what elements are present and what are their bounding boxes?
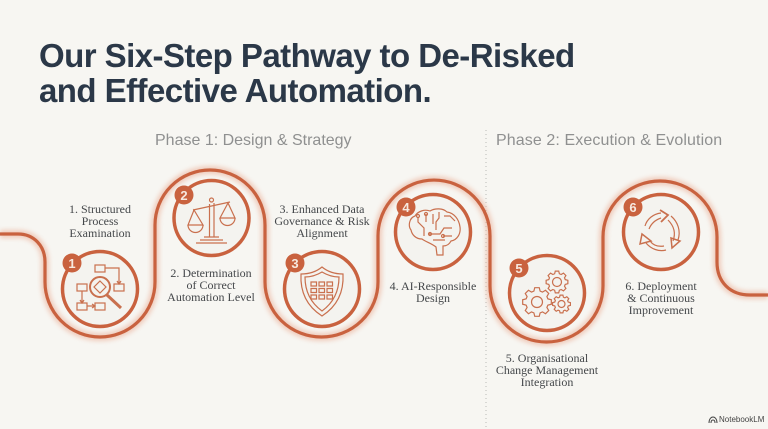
label: step 1: Examination	[69, 226, 131, 240]
label: step 3: 3. Enhanced Data	[280, 202, 364, 216]
step 1 node	[62, 252, 138, 326]
title: and Effective Automation.	[39, 72, 431, 109]
label: step 1	[69, 202, 131, 240]
label: step 3: Alignment	[296, 226, 348, 240]
step 3 node	[284, 252, 360, 326]
label: step 5: 5. Organisational	[506, 351, 588, 365]
label: step 1: Process	[82, 214, 118, 228]
label: step 6: & Continuous	[627, 291, 695, 305]
icon: gears	[523, 271, 570, 316]
icon: process flow and magnifier	[77, 265, 124, 310]
title: Our Six-Step Pathway to De-Risked	[39, 37, 575, 74]
label: step 4: Design	[416, 291, 450, 305]
label: step 2: of Correct	[186, 278, 235, 292]
label: step 2	[167, 266, 255, 304]
label: step 5	[496, 351, 598, 389]
step 4 node	[396, 194, 470, 270]
label: step 5: Integration	[521, 375, 573, 389]
icon: cycle arrows	[640, 210, 680, 251]
heading: phase 2: Phase 2: Execution & Evolution	[496, 132, 722, 149]
label: step 6	[625, 279, 697, 317]
icon: shield	[301, 267, 343, 316]
badge 1: 1	[68, 256, 76, 271]
label: step 4	[390, 279, 476, 305]
label: step 2: Automation Level	[167, 290, 255, 304]
step 2 node	[174, 180, 249, 256]
label: step 2: 2. Determination	[170, 266, 252, 280]
badge 2: 2	[180, 188, 188, 203]
label: step 6: Improvement	[629, 303, 693, 317]
step 6 node	[624, 194, 698, 270]
label: step 6: 6. Deployment	[625, 279, 697, 293]
icon: AI brain	[409, 209, 460, 255]
step 5 node	[510, 256, 584, 330]
badge 5: 5	[515, 261, 523, 276]
winding path	[0, 170, 768, 342]
icon: watermark logo	[709, 417, 717, 423]
title	[39, 37, 575, 109]
badge 6: 6	[629, 200, 637, 215]
label: step 5: Change Management	[496, 363, 598, 377]
badge 4: 4	[402, 200, 410, 215]
badge 3: 3	[291, 256, 299, 271]
label: step 1: 1. Structured	[69, 202, 131, 216]
heading: phase 1: Phase 1: Design & Strategy	[155, 132, 352, 149]
watermark: NotebookLM	[719, 415, 764, 424]
label: step 3	[274, 202, 370, 240]
label: step 4: 4. AI-Responsible	[390, 279, 476, 293]
icon: scales	[188, 198, 235, 243]
label: step 3: Governance & Risk	[274, 214, 370, 228]
